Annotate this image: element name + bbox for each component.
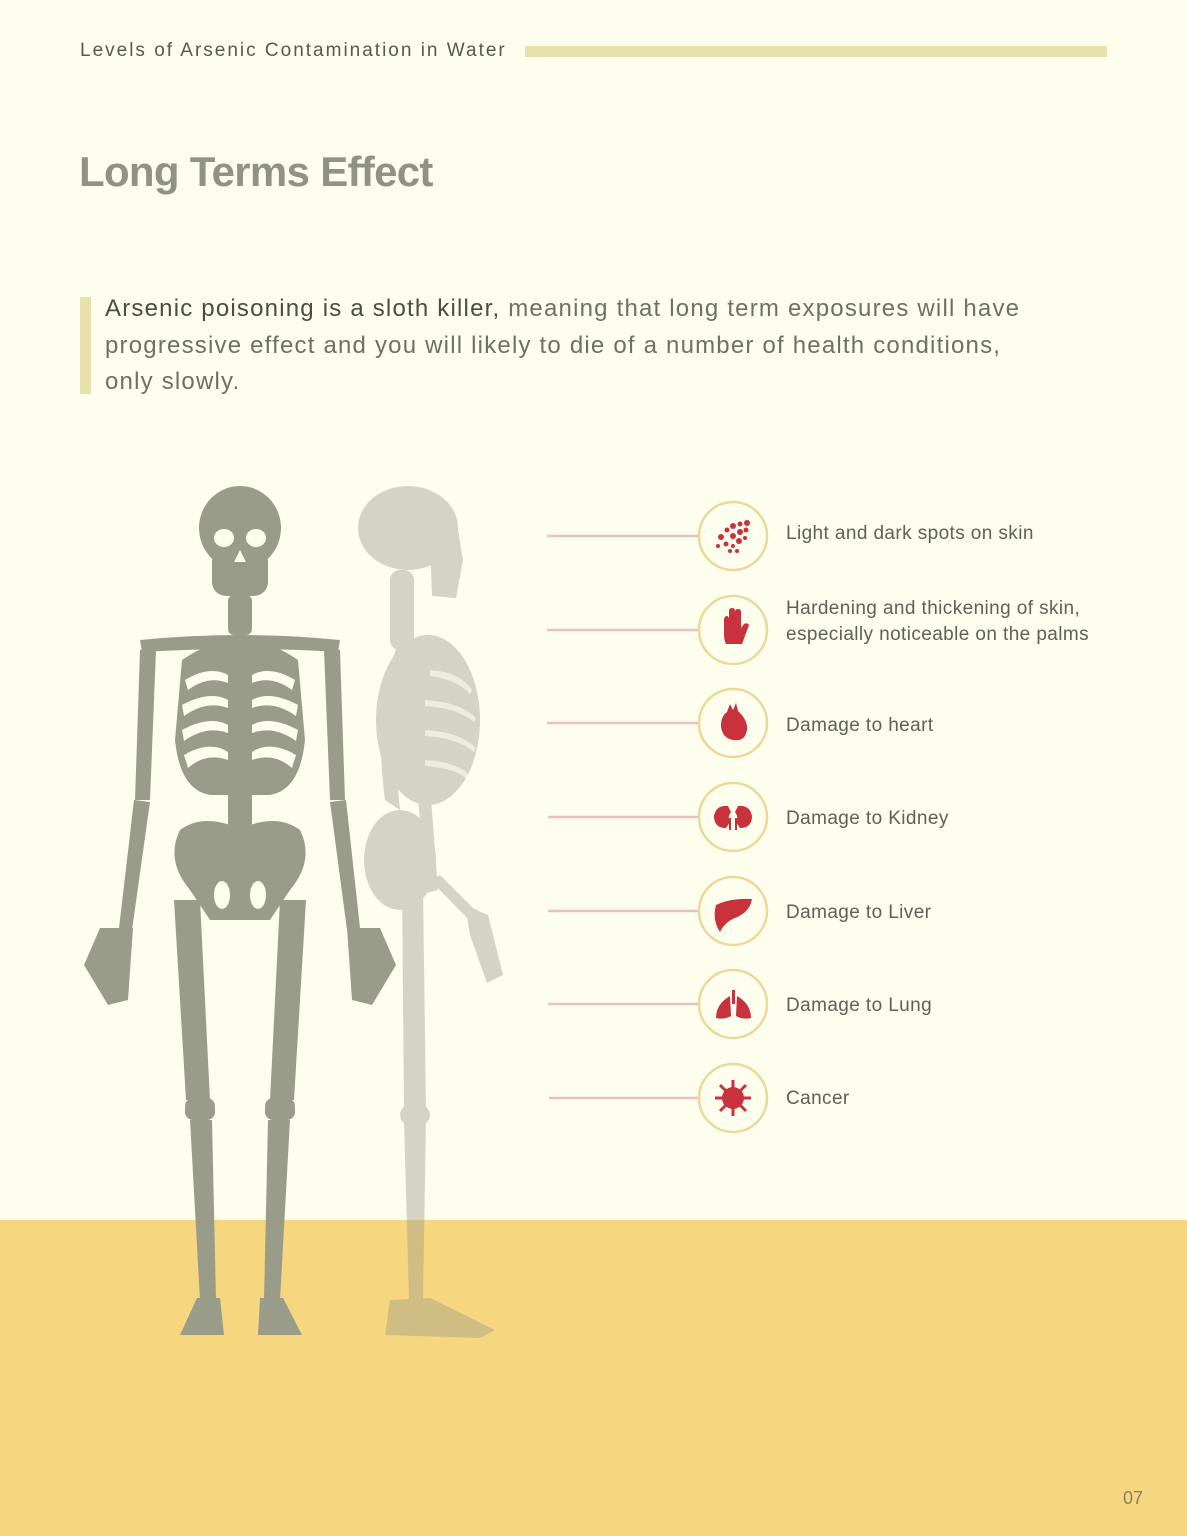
front skeleton <box>84 486 396 1335</box>
icon: skin spots <box>716 520 750 553</box>
label: lung: Damage to Lung <box>786 995 932 1016</box>
intro quote <box>80 295 1020 395</box>
intro quote: Arsenic poisoning is a sloth killer, meaning that long term exposures will have <box>105 295 1020 322</box>
label: skin spots: Light and dark spots on skin <box>786 523 1034 544</box>
label: skin hardening <box>786 598 1089 645</box>
icon: heart <box>721 703 747 740</box>
header bar <box>525 46 1107 57</box>
icon: kidney <box>714 806 752 830</box>
label: skin hardening: especially noticeable on the palms <box>786 624 1089 645</box>
intro quote: progressive effect and you will likely to die of a number of health conditions, <box>105 332 1001 358</box>
icon: hand <box>724 608 749 644</box>
header title: Levels of Arsenic Contamination in Water <box>80 40 507 61</box>
label: kidney: Damage to Kidney <box>786 808 949 829</box>
label: cancer: Cancer <box>786 1088 850 1109</box>
icon: cancer <box>715 1080 751 1116</box>
icon: lung <box>716 990 751 1019</box>
label: heart: Damage to heart <box>786 715 934 736</box>
title: Long Terms Effect <box>79 148 433 195</box>
footer band <box>0 1220 1187 1536</box>
page number: 07 <box>1123 1488 1143 1508</box>
label: skin hardening: Hardening and thickening of skin, <box>786 598 1080 619</box>
side skeleton <box>358 486 503 1338</box>
label: liver: Damage to Liver <box>786 902 931 923</box>
intro quote: only slowly. <box>105 368 240 395</box>
icon: liver <box>715 899 752 932</box>
